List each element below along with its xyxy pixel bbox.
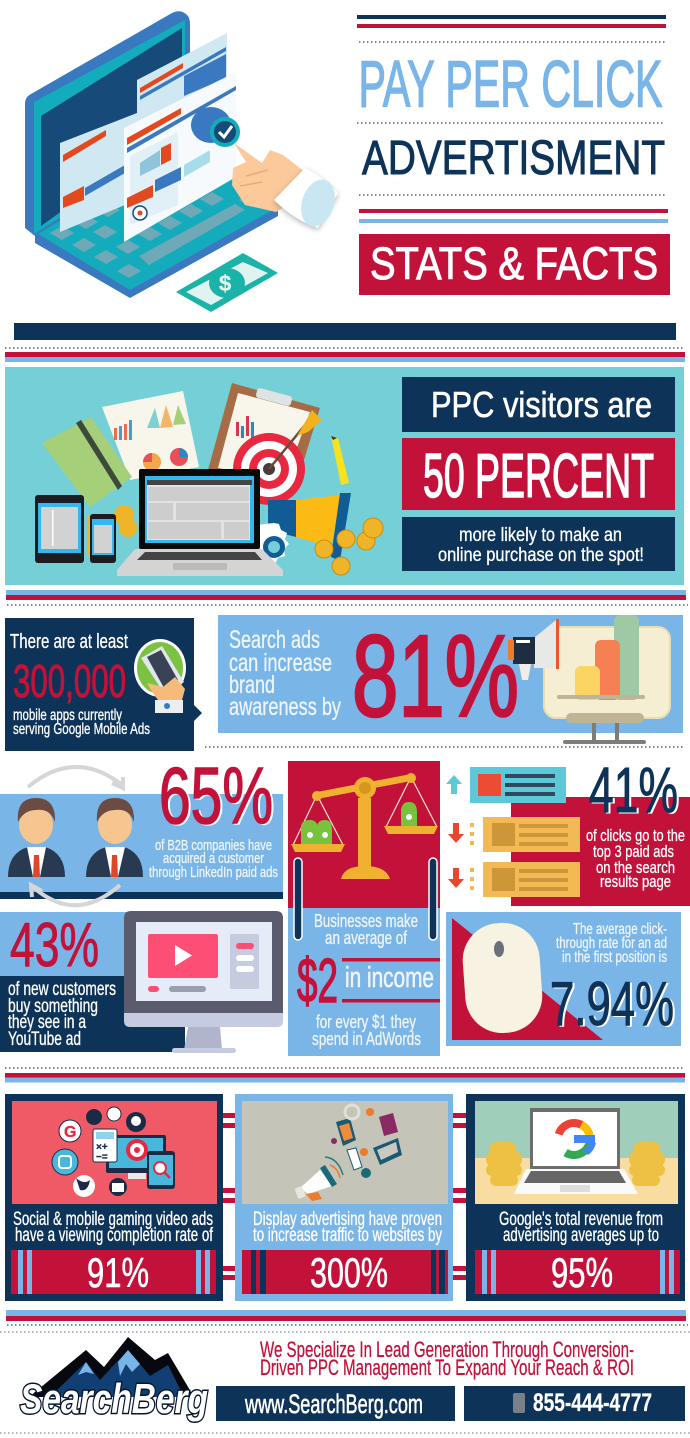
panel: 91 percent video ads: have a viewing completion rate of <box>15 1225 214 1246</box>
icon: lower ad boxes <box>448 817 580 897</box>
icon: video monitor <box>124 911 283 1053</box>
panel: 43 percent youtube: YouTube ad <box>8 1029 81 1050</box>
panel: 43 percent youtube: 43% <box>10 911 99 980</box>
panel: 300,000 mobile apps: serving Google Mobile Ads <box>13 721 150 738</box>
panel: 50 percent <box>5 367 684 585</box>
website box <box>216 1386 455 1421</box>
stat bar: 300 percent: 300% <box>310 1249 388 1296</box>
panel: 81 percent search ads: brand <box>229 671 275 699</box>
panel: 95 percent google <box>466 1094 685 1301</box>
panel: 81 percent search ads: 81% <box>352 611 519 741</box>
header bar <box>14 323 676 340</box>
box: more likely: more likely to make an <box>459 525 622 546</box>
logo: searchberg <box>20 1337 208 1422</box>
panel: 81 percent search ads: awareness by <box>229 693 341 721</box>
panel: 65 percent b2b: of B2B companies have <box>155 837 272 854</box>
box: more likely: online purchase on the spot! <box>438 545 644 566</box>
panel: $2 income: Businesses make <box>314 911 418 931</box>
panel: 81 percent search ads <box>218 611 683 744</box>
illustration: social icons: −= <box>96 1152 108 1163</box>
panel: 300 percent display: Display advertising have proven <box>253 1209 442 1230</box>
icon: dollar bill <box>176 253 278 312</box>
illustration: monitor with bars and megaphone <box>508 615 670 744</box>
panel: 43 percent youtube: of new customers <box>8 979 116 1000</box>
illustration: social icons: G <box>64 1124 76 1141</box>
panel: 81 percent search ads: can increase <box>229 649 332 677</box>
icon: top ad box <box>446 767 566 803</box>
panel: 41 percent clicks: results page <box>600 872 671 891</box>
phone box <box>464 1386 685 1421</box>
panel: 43 percent youtube: buy something <box>8 996 98 1017</box>
panel: 7.94 percent click-through <box>446 912 681 1046</box>
panel: 91 percent video ads <box>5 1094 223 1301</box>
panel: 300,000 mobile apps: 300,000 <box>13 655 126 707</box>
panel: $2 income: in income <box>345 962 434 994</box>
panel: 65 percent b2b: through LinkedIn paid ads <box>149 864 278 881</box>
icon: person left <box>8 798 65 877</box>
stat bar: 95 percent <box>475 1249 680 1296</box>
illustration: social icons: ×+ <box>96 1142 108 1153</box>
panel: $2 income: $2 <box>297 947 338 1016</box>
illustration: google laptop and coins <box>486 1108 665 1194</box>
stat bar: 91 percent: 91% <box>87 1249 149 1296</box>
panel: 300,000 mobile apps <box>5 618 202 751</box>
panel: 43 percent youtube: they see in a <box>8 1012 86 1033</box>
panel: 300 percent display: to increase traffic to websites by <box>253 1225 442 1246</box>
stat bar: 300 percent <box>242 1249 448 1296</box>
panel: $2 income: for every $1 they <box>316 1012 416 1032</box>
panel: 300 percent display <box>235 1094 453 1301</box>
illustration: laptop with ad windows and hand <box>25 11 341 298</box>
box: ppc visitors: PPC visitors are <box>431 384 652 425</box>
panel: $2 income <box>288 761 440 1056</box>
illustration: marketing desk <box>35 383 383 576</box>
panel: 300,000 mobile apps: There are at least <box>10 631 128 653</box>
panel: 81 percent search ads: Search ads <box>229 626 320 654</box>
panel: $2 income: an average of <box>325 928 408 948</box>
website box: www.SearchBerg.com <box>244 1389 423 1419</box>
panel: 65 percent b2b: 65% <box>159 751 273 840</box>
panel: 43 percent youtube <box>0 911 283 1053</box>
panel: 65 percent b2b: acquired a customer <box>163 850 264 867</box>
panel: 65 percent b2b <box>0 751 283 905</box>
panel: 41 percent clicks <box>446 754 690 906</box>
illustration: megaphone with icons <box>295 1105 402 1201</box>
icon: hand holding phone <box>134 639 186 713</box>
illustration: social icons <box>52 1107 175 1197</box>
panel: 300,000 mobile apps: mobile apps currently <box>13 707 122 724</box>
stat bar: 91 percent <box>11 1249 216 1296</box>
icon: person right <box>86 798 143 877</box>
title rules bottom <box>359 209 668 223</box>
logo: searchberg: SearchBerg <box>20 1375 208 1422</box>
box: more likely <box>402 517 675 571</box>
icon: dollar bill: $ <box>219 271 231 296</box>
title rules top <box>357 15 666 28</box>
panel: $2 income: spend in AdWords <box>312 1029 421 1049</box>
phone box: 855-444-4777 <box>533 1389 652 1417</box>
stat bar: 95 percent: 95% <box>551 1249 613 1296</box>
icon: mouse <box>460 920 545 1036</box>
icon: balance scale <box>291 773 438 879</box>
panel: 91 percent video ads: Social & mobile gaming video ads <box>13 1209 213 1230</box>
icon: cycle arrows <box>28 767 123 905</box>
box: ppc visitors <box>402 377 675 432</box>
tagline <box>260 1337 634 1380</box>
connectors between panels <box>223 1113 466 1280</box>
